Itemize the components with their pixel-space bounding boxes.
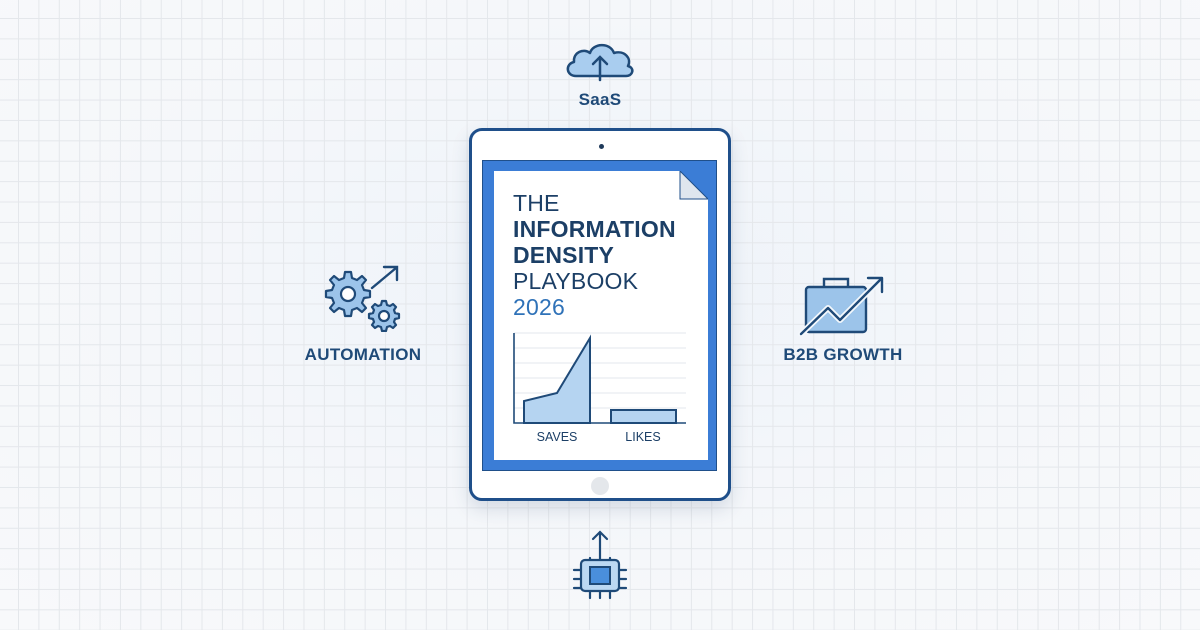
title text: PLAYBOOK bbox=[513, 268, 638, 294]
label: B2B GROWTH: B2B GROWTH bbox=[783, 345, 903, 364]
home button bbox=[591, 477, 609, 495]
icon: chip with up arrow bbox=[572, 530, 628, 600]
title text: 2026 bbox=[513, 294, 565, 320]
title text: INFORMATION bbox=[513, 216, 676, 242]
tablet bbox=[469, 128, 731, 501]
title text: DENSITY bbox=[513, 242, 614, 268]
icon: briefcase with growth arrow bbox=[800, 275, 885, 336]
chart: saves vs likes bbox=[513, 332, 686, 441]
screen bbox=[482, 160, 717, 471]
chart: saves vs likes: SAVES bbox=[537, 430, 577, 444]
page fold corner bbox=[680, 171, 708, 200]
chart: saves vs likes: LIKES bbox=[625, 430, 661, 444]
icon: gears with arrow bbox=[324, 266, 400, 332]
title text bbox=[514, 195, 674, 315]
camera dot bbox=[599, 144, 604, 149]
paper document bbox=[494, 171, 708, 460]
title text: THE bbox=[513, 190, 560, 216]
label: SaaS: SaaS bbox=[579, 90, 621, 109]
icon: cloud upload (SaaS) bbox=[566, 44, 634, 82]
label: AUTOMATION: AUTOMATION bbox=[305, 345, 421, 364]
